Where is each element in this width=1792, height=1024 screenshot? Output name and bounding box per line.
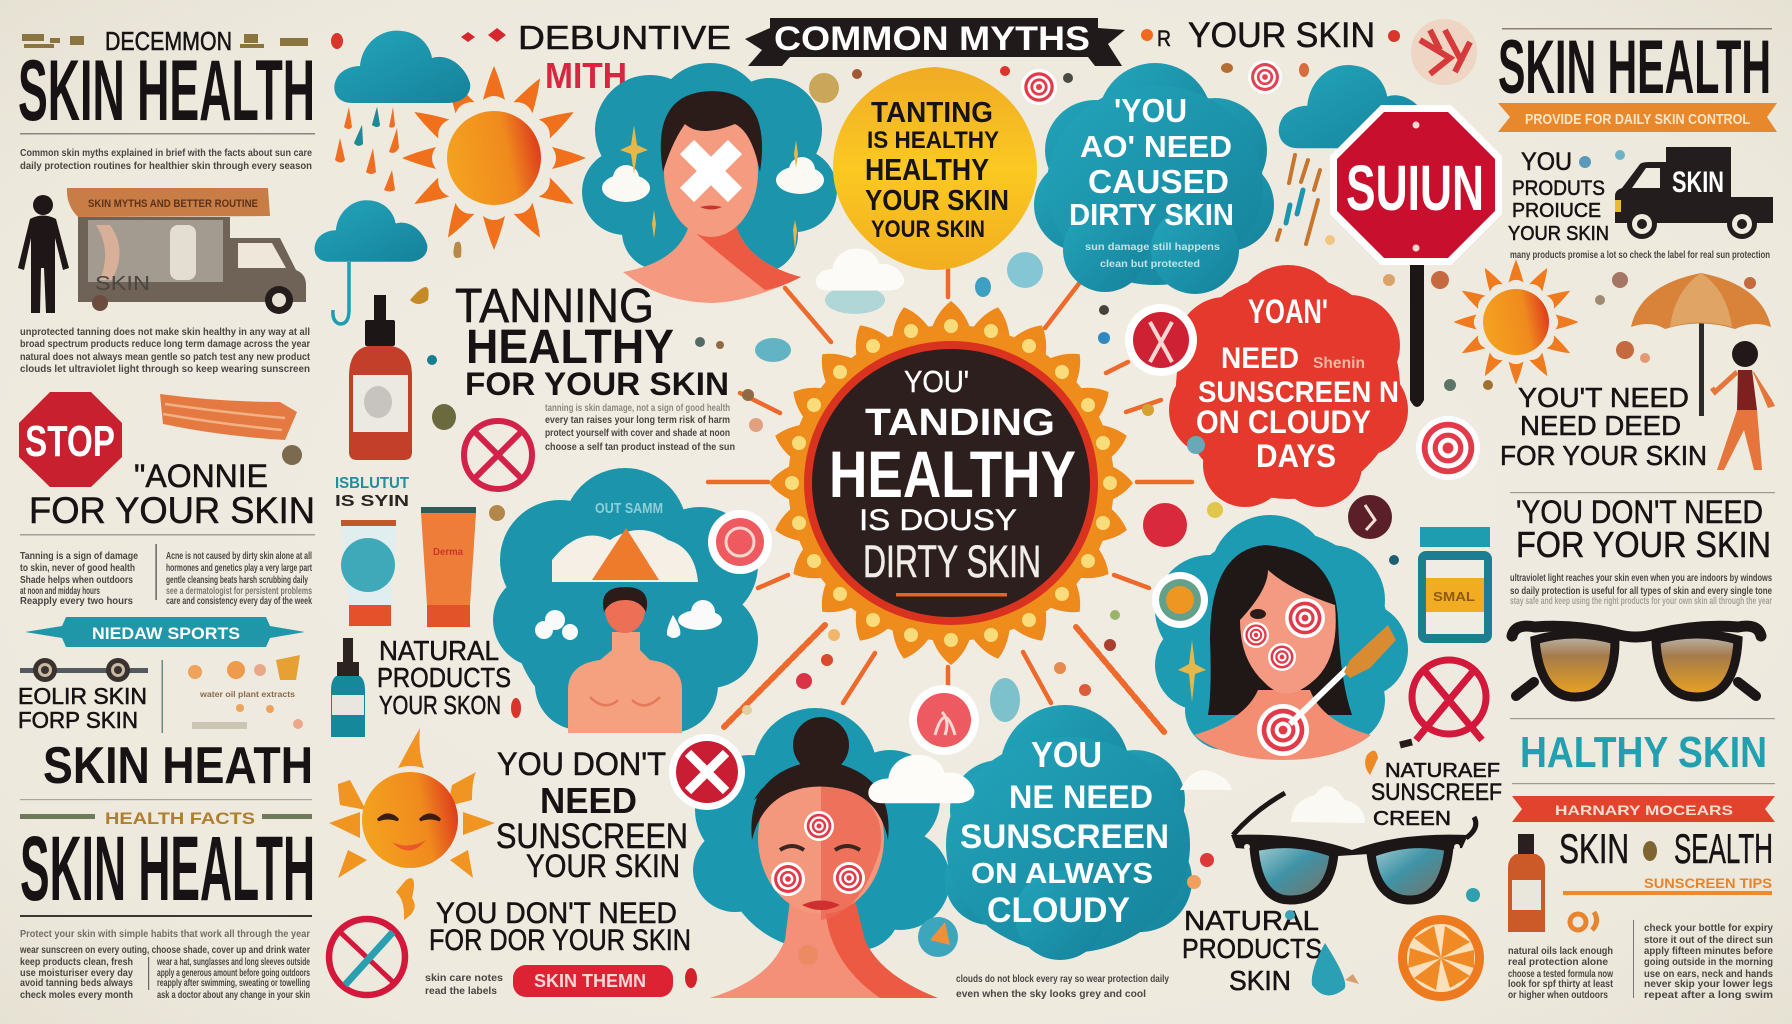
panel: red myth bubble: SUNSCREEN N	[1198, 376, 1399, 409]
illustration: woman face	[710, 717, 938, 998]
ingredient blobs: water oil plant extracts	[199, 690, 296, 699]
icon: sun	[402, 66, 586, 250]
illustration: shirtless man	[568, 587, 682, 733]
icon: standing person	[18, 195, 69, 313]
footnote	[956, 974, 1169, 1000]
text: you don't need sunscreen: SUNSCREEN	[496, 817, 688, 856]
small text	[545, 403, 735, 453]
coloured caption strip: HEALTH FACTS	[105, 809, 255, 828]
two column text: hormones and genetics play a very large part	[166, 563, 312, 574]
footer text columns: wear a hat, sunglasses and long sleeves outside	[156, 957, 310, 968]
text columns: choose a tested formula now	[1508, 969, 1613, 980]
sparkles	[1178, 640, 1206, 702]
text columns: repeat after a long swim	[1644, 990, 1773, 1001]
badge: skin rosette	[708, 510, 772, 574]
teal blob	[1034, 63, 1274, 294]
badge: green orange	[1152, 572, 1208, 628]
footer text columns: use moisturiser every day	[20, 968, 133, 979]
text: natural sunscreen	[1365, 751, 1502, 830]
text: natural products: YOUR SKON	[379, 690, 501, 720]
panel: tanning healthy text: TANNING	[455, 280, 654, 333]
text: SKIN HEALTH	[20, 818, 315, 920]
two column text: to skin, never of good health	[20, 563, 135, 574]
footer text columns: Protect your skin with simple habits that work all through the year	[20, 929, 310, 940]
panel: stop sign sun: SUIUN	[1346, 152, 1484, 224]
footnote: even when the sky looks grey and cool	[956, 989, 1146, 1000]
decorative rosette	[1416, 416, 1480, 480]
text: natural products: PRODUCTS	[377, 662, 511, 693]
two column text: Acne is not caused by dirty skin alone at all	[166, 551, 312, 562]
panel: products lower left: IS SYIN	[335, 493, 409, 510]
icon: serum bottle	[349, 295, 412, 460]
panel: right lower center items	[1180, 416, 1502, 1001]
text: debunking: DEBUNTIVE	[518, 19, 731, 56]
text columns: store it out of the direct sun	[1644, 935, 1773, 946]
text: forp skin: FORP SKIN	[18, 707, 138, 733]
icon: sun	[1453, 259, 1579, 385]
footer text columns: avoid tanning beds always	[20, 978, 133, 989]
panel: teal myth bubble lower: NE NEED	[1009, 779, 1153, 815]
heading: your skin: YOUR SKIN	[1188, 16, 1375, 55]
panel: man with x myth bubble	[582, 63, 837, 303]
panel: teal myth bubble lower: YOU	[1031, 734, 1102, 775]
red blob	[1169, 265, 1408, 507]
text: natural sunscreen: CREEN	[1373, 808, 1451, 830]
small label: ISBLUTUT	[335, 475, 409, 492]
illustration: man	[623, 91, 801, 303]
red pill button: SKIN THEMN	[534, 971, 646, 991]
panel: central sun badge: YOU'	[904, 364, 969, 399]
footer text columns	[19, 929, 310, 1001]
panel: teal myth bubble lower: CLOUDY	[987, 891, 1130, 930]
icon: water drop	[1312, 943, 1345, 995]
text columns: real protection alone	[1508, 957, 1608, 968]
panel: weather icons upper left	[315, 31, 586, 460]
panel: teal myth bubble upper right: CAUSED	[1088, 163, 1229, 200]
text columns: use on ears, neck and hands	[1644, 969, 1773, 980]
icon: walking woman	[1712, 341, 1775, 470]
panel: right column	[1453, 25, 1777, 1001]
panel: stop sign sun	[1277, 65, 1502, 407]
panel: teal myth bubble upper right: clean but protected	[1100, 259, 1200, 270]
kicker ornaments	[22, 34, 308, 48]
text: you need: NEED DEED	[1520, 410, 1681, 441]
two column text: Shade helps when outdoors	[20, 575, 133, 586]
icon: orange slice	[1398, 915, 1484, 1001]
icon: white cloud	[816, 249, 904, 314]
icon: amber bottle	[1508, 834, 1545, 932]
text: natural products: NATURAL	[379, 635, 499, 666]
icon: teal bottle	[331, 638, 365, 737]
text: skin sealth: SKIN	[1559, 825, 1629, 872]
text: eolir skin: EOLIR SKIN	[18, 683, 147, 709]
heading: skin heath: SKIN HEATH	[43, 737, 313, 795]
teal blob	[582, 63, 837, 280]
text: natural products skin	[1182, 905, 1322, 996]
footnote: clouds do not block every ray so wear protection daily	[956, 974, 1169, 985]
panel: teal myth bubble upper right: AO' NEED	[1080, 129, 1232, 164]
panel: teal myth bubble upper right: 'YOU	[1114, 92, 1187, 129]
text: natural sunscreen: SUNSCREEF	[1371, 779, 1502, 806]
text columns: going outside in the morning	[1644, 957, 1773, 968]
icon: cloud umbrella	[315, 200, 427, 324]
footer text columns: reapply after swimming, sweating or towelling	[157, 978, 310, 989]
octagon sign	[1330, 105, 1502, 265]
icon: orange swirl	[1570, 912, 1597, 930]
text: you need	[1500, 382, 1707, 471]
icon: rain cloud	[334, 31, 470, 191]
icon: orange sunglasses	[1512, 626, 1761, 697]
text: natural products	[377, 635, 521, 720]
intro text: daily protection routines for healthier skin through every season	[20, 161, 312, 172]
icon: white clouds	[1180, 770, 1365, 823]
icon: white x	[687, 147, 735, 195]
panel: teal myth bubble upper right: DIRTY SKIN	[1069, 197, 1234, 232]
panel: teal myth bubble lower: SUNSCREEN	[960, 818, 1169, 856]
panel: left column	[18, 26, 315, 1001]
two column text: at noon and midday hours	[20, 586, 100, 597]
icon: umbrella cloud	[552, 528, 698, 582]
panel: red myth bubble: YOAN'	[1248, 293, 1328, 331]
teal ribbon	[25, 617, 305, 647]
sparkles	[620, 125, 798, 250]
red pill button	[513, 965, 673, 997]
icon: black truck: SKIN	[1672, 166, 1724, 199]
panel: red myth bubble: Shenin	[1313, 355, 1365, 372]
text: you don't need sunscreen: YOU DON'T NEED	[436, 897, 677, 930]
kicker heading: DECEMMON	[105, 26, 232, 56]
icon: orange fabric swatch	[160, 394, 302, 465]
text: natural sunscreen: NATURAEF	[1385, 760, 1500, 782]
text columns: natural oils lack enough	[1508, 946, 1613, 957]
icon: cream jar	[1418, 527, 1492, 643]
dark disc	[808, 345, 1094, 621]
text: you don't need sunscreen: YOUR SKIN	[526, 848, 680, 884]
icon: red diamonds	[461, 28, 506, 42]
body text lines: broad spectrum products reduce long term damage across the year	[20, 339, 310, 350]
text: you products: YOU	[1521, 148, 1572, 176]
panel: red myth bubble: ON CLOUDY	[1196, 404, 1371, 440]
sun petals	[769, 301, 1133, 665]
text: myth: MITH	[545, 55, 627, 96]
icon: orange tube: Derma	[433, 547, 463, 558]
text: aonnie: "AONNIE	[134, 458, 268, 494]
small caption: read the labels	[425, 986, 497, 997]
icon: stop sign: STOP	[25, 417, 115, 466]
text: you need: FOR YOUR SKIN	[1500, 440, 1707, 471]
teal blob	[693, 708, 950, 950]
heading group: debunking	[461, 19, 731, 96]
icon: van with banner: SKIN MYTHS AND BETTER ROUTINE	[88, 198, 258, 210]
icon: red dot	[331, 33, 343, 49]
icon: no sign with handles	[1400, 660, 1486, 745]
body text	[1510, 573, 1772, 607]
heading: skin health: SKIN HEALTH	[18, 43, 315, 139]
two column text: see a dermatologist for persistent problems	[166, 586, 312, 597]
panel: teal myth bubble lower: ON ALWAYS	[971, 858, 1153, 890]
icon: rain cloud	[1277, 65, 1430, 244]
icon: van with banner	[67, 188, 306, 314]
orange ribbon: PROVIDE FOR DAILY SKIN CONTROL	[1525, 111, 1750, 128]
icon: teal sunglasses	[1231, 793, 1476, 900]
panel: teal myth bubble lower	[945, 705, 1192, 960]
body text lines	[20, 327, 311, 375]
footer text columns: check moles every month	[20, 990, 133, 1001]
panel: tanning healthy text: HEALTHY	[466, 321, 674, 374]
pole	[1410, 265, 1424, 407]
panel: central sun badge: TANDING	[865, 402, 1055, 444]
icon: skin cell rosette	[1411, 19, 1477, 85]
panel: red myth bubble	[1169, 265, 1408, 507]
footer text columns: apply a generous amount before going outdoors	[157, 968, 310, 979]
text: natural products skin: SKIN	[1229, 965, 1291, 996]
footer text columns: ask a doctor about any change in your skin	[157, 990, 310, 1001]
text columns	[1508, 920, 1773, 1001]
icon: van with banner: SKIN	[95, 273, 150, 295]
orange ribbon	[1498, 103, 1777, 132]
text columns: or higher when outdoors	[1508, 990, 1608, 1001]
teal blob	[493, 468, 758, 733]
scattered confetti icons	[410, 60, 1756, 984]
text: natural products skin: PRODUCTS	[1182, 933, 1322, 964]
yellow dots	[785, 319, 1117, 647]
teal blob	[945, 705, 1192, 960]
panel: red myth bubble: NEED	[1221, 342, 1299, 375]
panel: woman with brush bubble	[1152, 515, 1408, 760]
panel: yellow myth bubble: TANTING	[871, 97, 993, 129]
panel: yellow myth bubble: HEALTHY	[865, 152, 989, 187]
two column text: Reapply every two hours	[20, 596, 133, 607]
footer text columns: wear sunscreen on every outing, choose shade, cover up and drink water	[19, 945, 310, 956]
icon: prohibited x circle	[464, 421, 532, 489]
panel: tanning healthy text	[455, 280, 735, 489]
orange subheading: SUNSCREEN TIPS	[1644, 875, 1772, 891]
panel: central sun badge: HEALTHY	[829, 437, 1076, 511]
text: you products: YOUR SKIN	[1508, 223, 1609, 245]
teal blob	[1155, 515, 1408, 750]
badge: rosette top center	[909, 685, 979, 755]
text: you don't need sunscreen	[429, 746, 691, 957]
text: you products	[1508, 148, 1609, 245]
red ribbon: HARNARY MOCEARS	[1555, 802, 1733, 818]
small text: every tan raises your long term risk of harm	[545, 415, 730, 426]
banner: common myths: COMMON MYTHS	[774, 20, 1090, 58]
small caption	[425, 973, 503, 997]
small text: protect yourself with cover and shade at noon	[545, 428, 730, 439]
two column text: Tanning is a sign of damage	[20, 551, 138, 562]
text: you don't need sunscreen: NEED	[540, 780, 637, 821]
icon: beach umbrella	[1631, 273, 1771, 416]
icon: white clouds	[602, 157, 824, 202]
text columns: apply fifteen minutes before	[1644, 946, 1773, 957]
badge: red x	[669, 734, 745, 810]
text: for your skin: FOR YOUR SKIN	[29, 490, 315, 531]
small caption: skin care notes	[425, 973, 503, 984]
icon: black truck	[1615, 147, 1773, 239]
teal ribbon: NIEDAW SPORTS	[92, 624, 240, 643]
panel: connector lines	[708, 270, 1192, 733]
panel: yellow myth bubble: YOUR SKIN	[871, 216, 985, 243]
panel: man under umbrella bubble	[493, 468, 772, 733]
panel: teal myth bubble upper right: sun damage still happens	[1085, 242, 1220, 253]
icon: no sign	[329, 919, 405, 995]
panel: central sun badge	[769, 301, 1133, 665]
body text lines: natural does not always mean gentle so patch test any new product	[20, 352, 311, 363]
panel: red myth bubble: DAYS	[1256, 438, 1336, 474]
icon: blue tube	[341, 520, 396, 626]
panel: yellow myth bubble: YOUR SKIN	[865, 185, 1009, 217]
panel: woman with spots bubble	[669, 708, 950, 998]
text: you don't need sunscreen: FOR DOR YOUR SKIN	[429, 924, 691, 957]
body text lines: clouds let ultraviolet light through so keep wearing sunscreen	[20, 364, 310, 375]
small text: tanning is skin damage, not a sign of good health	[545, 403, 730, 414]
icon: white cloud	[868, 755, 974, 803]
intro text: Common skin myths explained in brief with the facts about sun care	[20, 148, 312, 159]
icon: rain drops and cloud	[535, 600, 722, 640]
illustration: woman	[1194, 545, 1396, 760]
text columns: look for spf thirty at least	[1508, 979, 1614, 990]
body text lines: unprotected tanning does not make skin healthy in any way at all	[20, 327, 310, 338]
panel: teal myth bubble upper right	[1034, 63, 1274, 294]
text: you products: PRODUTS	[1512, 177, 1605, 200]
text: you products: PROIUCE	[1512, 200, 1601, 222]
yellow blob	[833, 67, 1037, 270]
text: natural products skin: NATURAL	[1184, 905, 1319, 936]
orange subheading	[1563, 875, 1772, 895]
text columns: check your bottle for expiry	[1644, 923, 1773, 934]
text columns: never skip your lower legs	[1644, 979, 1773, 990]
icon: orange tube	[421, 507, 476, 627]
intro text	[20, 148, 312, 172]
text: skin sealth	[1559, 825, 1773, 872]
icon: cream jar: SMAL	[1433, 589, 1475, 604]
panel: yellow myth bubble: IS HEALTHY	[867, 127, 999, 154]
red ribbon	[1512, 796, 1775, 822]
badge: x right	[1125, 304, 1197, 376]
panel: central sun badge: DIRTY SKIN	[863, 536, 1041, 587]
two column text	[20, 544, 312, 607]
banner: common myths	[745, 18, 1125, 66]
small text: choose a self tan product instead of the sun	[545, 442, 735, 453]
text: you don't need sunscreen: YOU DON'T	[497, 746, 666, 782]
panel: tanning healthy text: FOR YOUR SKIN	[465, 366, 729, 402]
two column text: care and consistency every day of the week	[166, 596, 312, 607]
heading: your skin: R	[1157, 26, 1171, 51]
text: you need: YOU'T NEED	[1518, 382, 1689, 413]
text: you don't need: 'YOU DON'T NEED	[1516, 494, 1763, 530]
panel: man under umbrella bubble: OUT SAMM	[595, 500, 663, 517]
ingredient blobs	[188, 655, 303, 729]
icon: wheels bar	[20, 658, 148, 682]
panel: products lower left	[329, 475, 697, 997]
panel: yellow myth bubble	[833, 67, 1037, 270]
icon: stop sign	[19, 392, 122, 487]
icon: smiling sun	[329, 728, 495, 920]
two column text: gentle cleansing beats harsh scrubbing daily	[166, 575, 308, 586]
footer text columns: keep products clean, fresh	[20, 957, 133, 968]
text: for your skin: FOR YOUR SKIN	[1516, 524, 1771, 565]
panel: central sun badge: IS DOUSY	[859, 504, 1017, 537]
